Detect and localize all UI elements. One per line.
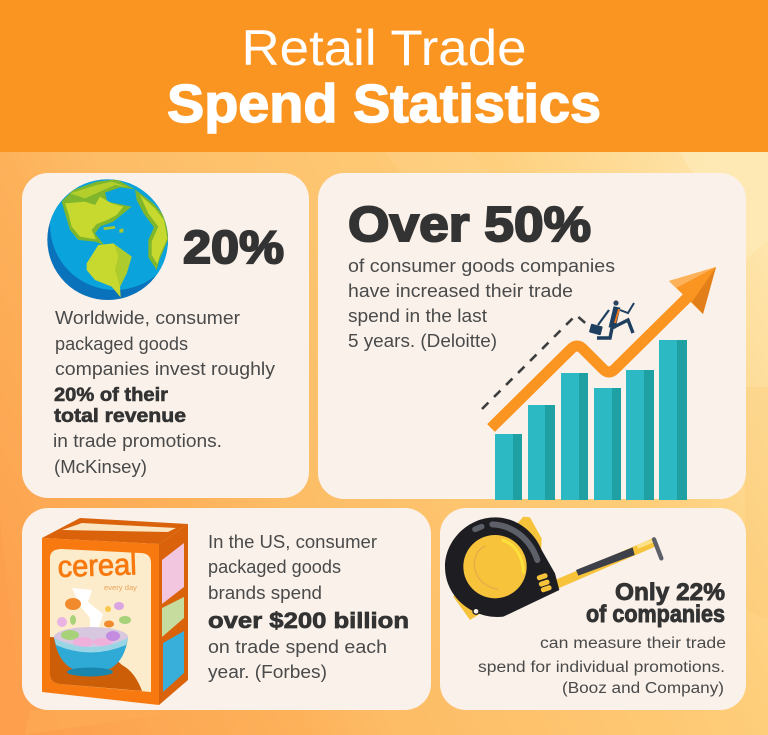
- stat: only 22 percent: Only 22%: [615, 579, 725, 606]
- bar chart: [495, 340, 687, 500]
- text: description: packaged goods: [55, 334, 188, 354]
- text: description: on trade spend each: [208, 637, 387, 657]
- icon: tape measure: [445, 517, 661, 620]
- text: description: year. (Forbes): [208, 662, 327, 682]
- text: description: In the US, consumer: [208, 532, 377, 552]
- cereal label: cereal: [57, 548, 137, 584]
- text: description: (McKinsey): [54, 457, 147, 477]
- icon: cereal box: every day: [104, 585, 138, 592]
- text: description: spend for individual promotions.: [478, 659, 725, 676]
- icon: cereal box: [42, 518, 188, 705]
- text: description: of consumer goods companies: [348, 256, 615, 276]
- header band: [0, 0, 768, 152]
- text: description: [53, 308, 275, 477]
- text: description: [478, 635, 726, 697]
- text: description: in trade promotions.: [53, 431, 222, 451]
- title: Retail Trade: [242, 20, 526, 76]
- text: description: companies invest roughly: [55, 359, 275, 379]
- text: description: [208, 532, 409, 682]
- text: description: total revenue: [54, 406, 186, 427]
- stat: Over 50%: Over 50%: [348, 198, 591, 252]
- panel: measuring: [440, 508, 746, 710]
- text: description: [348, 256, 615, 351]
- stat: only 22 percent: of companies: [586, 601, 725, 628]
- text: description: can measure their trade: [540, 635, 726, 652]
- title: [167, 20, 601, 134]
- stat: only 22 percent: [586, 579, 725, 628]
- text: description: Worldwide, consumer: [55, 308, 240, 328]
- title: Spend Statistics: [167, 74, 601, 134]
- panel: over 50 percent: [318, 173, 746, 500]
- icon: businessman: [589, 300, 634, 338]
- stat: 20%: 20%: [183, 221, 284, 273]
- panel: cereal: [22, 508, 431, 710]
- dashed trend line: [482, 315, 590, 409]
- text: description: 20% of their: [54, 385, 169, 406]
- background: [0, 150, 768, 735]
- text: description: spend in the last: [348, 306, 487, 326]
- text: description: (Booz and Company): [562, 680, 724, 697]
- text: description: packaged goods: [208, 557, 341, 577]
- panel: 20 percent: [22, 160, 309, 498]
- text: description: over $200 billion: [208, 608, 409, 633]
- text: description: have increased their trade: [348, 281, 573, 301]
- arrow: [491, 267, 716, 428]
- icon: globe: [47, 179, 168, 300]
- text: description: brands spend: [208, 583, 322, 603]
- text: description: 5 years. (Deloitte): [348, 331, 497, 351]
